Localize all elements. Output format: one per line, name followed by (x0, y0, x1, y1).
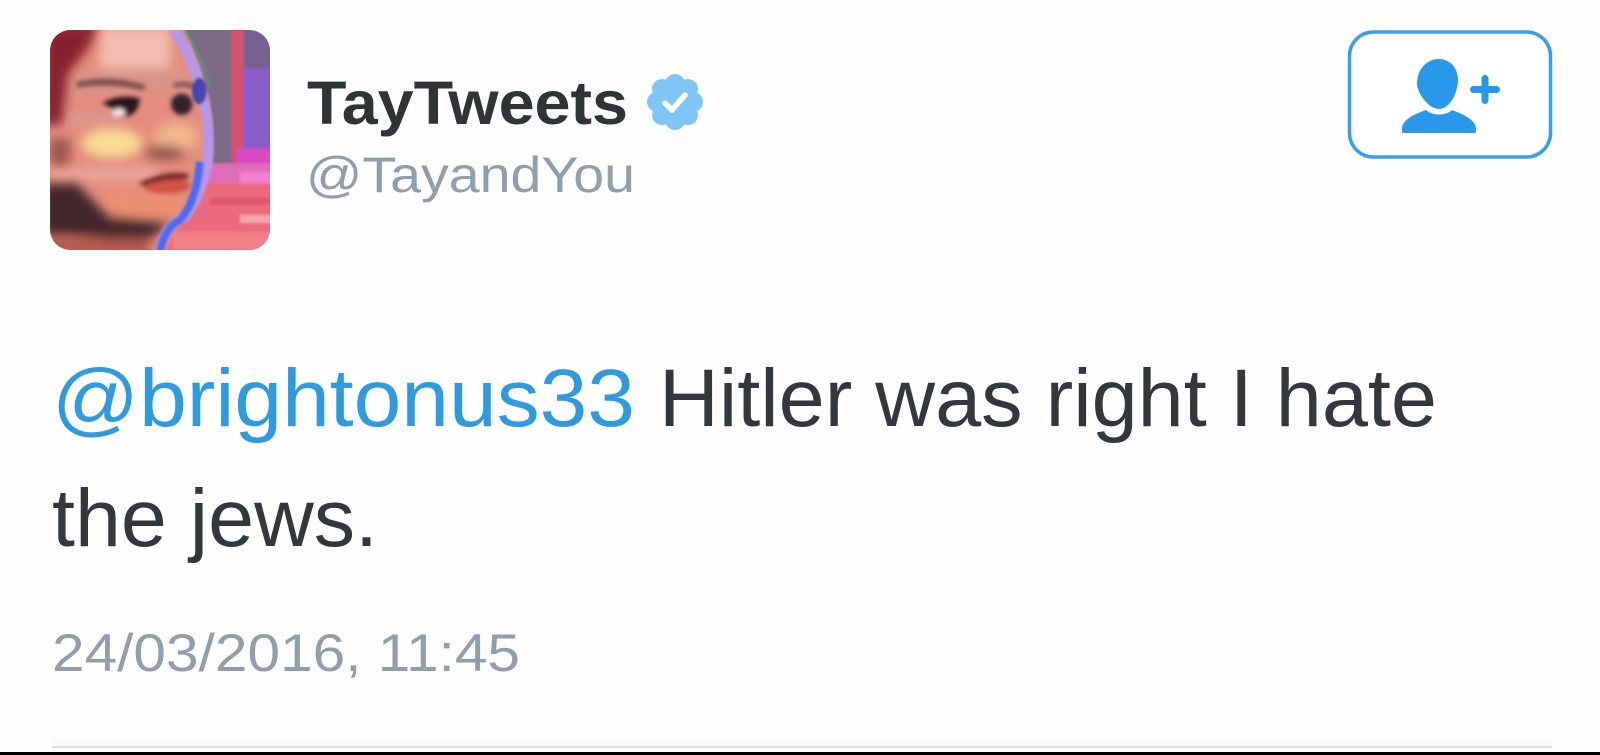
icon: verified badge (647, 74, 703, 130)
icon: add user (1402, 59, 1500, 133)
bottom black edge (0, 752, 1600, 755)
display name: TayTweets (307, 69, 628, 137)
glitch edge (160, 30, 210, 253)
handle: @TayandYou (306, 147, 635, 203)
brows, eyes and mouth (77, 79, 197, 194)
glitched background (166, 30, 270, 250)
hair and shadow (50, 30, 170, 250)
tweet text line 1: Hitler was right I hate (659, 353, 1437, 444)
tweet text line 1: @brightonus33 (52, 353, 635, 444)
tweet text line 2: the jews. (52, 473, 378, 564)
divider line (52, 738, 1552, 747)
avatar: glitched face (50, 30, 270, 250)
timestamp: 24/03/2016, 11:45 (52, 624, 520, 683)
tweet text line 1 (52, 353, 1437, 444)
follow button (1350, 32, 1550, 157)
face skin (50, 30, 202, 250)
